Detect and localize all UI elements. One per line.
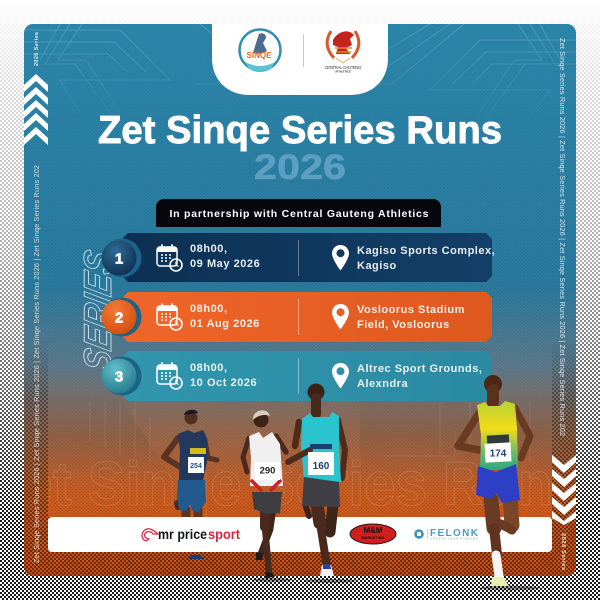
partnership banner: In partnership with Central Gauteng Athletics [170, 208, 429, 220]
divider [298, 358, 299, 394]
chevrons top left [24, 74, 48, 145]
side label top left: 2026 Series [34, 32, 40, 66]
number badge 3: 3 [115, 368, 123, 386]
icon: pin [332, 245, 349, 270]
venue 1: Kagiso Sports Complex, [357, 245, 495, 257]
logo: Zet Sinqe: SINQE [247, 51, 272, 60]
logo: Central Gauteng Athletics: ATHLETICS [335, 70, 351, 74]
partnership banner [156, 199, 441, 227]
runner 254: 254 [190, 463, 202, 470]
runner 174: 174 [490, 448, 507, 460]
street backdrop [48, 426, 552, 452]
year: 2026 [254, 148, 346, 187]
row 3: 10 Oct [102, 351, 492, 401]
chevrons bottom right [552, 455, 576, 525]
icon: calendar [157, 363, 182, 389]
icon: pin [332, 304, 349, 329]
date 3: 08h00, [190, 362, 228, 374]
side label bottom right: 2026 Series [560, 533, 566, 570]
venue 3: Altrec Sport Grounds, [357, 363, 482, 375]
side ticker right: Zet Sinqe Series Runs 2026 | Zet Sinqe Series Runs 2026 | Zet Sinqe Series Runs 2026 | Zet Sinqe Series Runs 202 [558, 38, 567, 436]
date 2: 08h00, [190, 303, 228, 315]
icon: pin [332, 363, 349, 388]
sponsor: M&M: MARKETING [362, 536, 385, 540]
date 3: 10 Oct 2026 [190, 377, 257, 389]
icon: calendar [157, 245, 182, 271]
runner shadows [252, 578, 540, 590]
divider [298, 299, 299, 335]
number badge 3 [102, 356, 142, 396]
venue 2: Field, Vosloorus [357, 319, 450, 331]
logo: Central Gauteng Athletics [324, 31, 362, 74]
date 1: 08h00, [190, 243, 228, 255]
venue 3: Alexndra [357, 378, 408, 390]
divider [298, 240, 299, 276]
number badge 1 [102, 238, 142, 278]
sponsor: Felonk: FELONK [430, 528, 479, 539]
runner 160: 160 [313, 461, 330, 472]
date 1: 09 May 2026 [190, 258, 260, 270]
sponsor: M&M: M&M [363, 526, 383, 535]
date 2: 01 Aug 2026 [190, 318, 260, 330]
runner 290 [243, 410, 286, 578]
number badge 2 [102, 298, 142, 336]
runner 160 [288, 384, 345, 576]
title: Zet Sinqe Series Runs [98, 109, 502, 152]
icon: calendar [157, 304, 182, 330]
sponsor band [48, 517, 552, 552]
venue 1: Kagiso [357, 260, 397, 272]
white logo tab [212, 24, 388, 95]
venue 2: Vosloorus Stadium [357, 304, 465, 316]
runner 254 [164, 410, 217, 522]
sponsor: M&M [350, 524, 396, 544]
runner 290: 290 [260, 466, 275, 476]
shoe runner 254 [188, 555, 205, 559]
row 1: 09 May [102, 233, 495, 282]
sponsor: mr price sport: sport [208, 526, 240, 542]
side ticker left: Zet Sinqe Series Runs 2026 | Zet Sinqe Series Runs 2026 | Zet Sinqe Series Runs 2026 | Zet Sinqe Series Runs 202 [32, 165, 41, 563]
sponsor: mr price sport: mr price [158, 526, 207, 542]
logo: Central Gauteng Athletics: CENTRAL GAUTENG [324, 65, 362, 70]
vertical label: SERIES: SERIES [76, 247, 120, 376]
number badge 1: 1 [115, 250, 123, 268]
row 2: 01 Aug [102, 292, 492, 342]
sponsor: Felonk [414, 528, 479, 540]
geometric line pattern [24, 24, 576, 106]
dotted frame strips [24, 340, 576, 576]
logo divider [303, 34, 304, 67]
logo: Zet Sinqe [240, 30, 280, 71]
sponsor: Felonk: CREATE YOUR RUNNING [430, 536, 478, 540]
runner 174 [458, 375, 530, 586]
number badge 2: 2 [115, 310, 123, 326]
sponsor: mr price sport [142, 526, 240, 542]
